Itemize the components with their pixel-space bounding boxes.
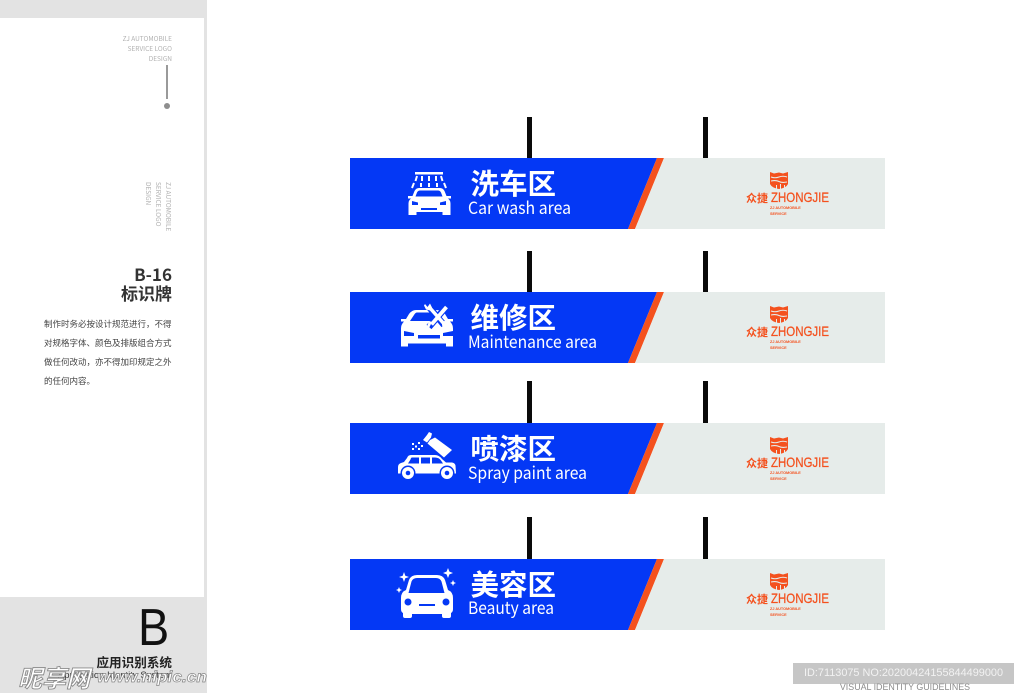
letter: large B: B: [138, 599, 169, 657]
poles: [527, 517, 708, 559]
text: sidebar description: 的任何内容。: [44, 375, 95, 387]
logo: ZJ AUTOMOBILE: [770, 206, 801, 210]
icon: car wash: [408, 172, 451, 215]
logo: SERVICE: [770, 613, 787, 617]
watermark: nipic logo: www.nipic.cn: [97, 669, 207, 686]
heading: B-16 sign: [121, 261, 172, 304]
logo: SERVICE: [770, 212, 787, 216]
sign 2: maintenance area: [350, 251, 885, 363]
text: sidebar description: 对规格字体、颜色及排版组合方式: [44, 337, 172, 349]
sign 3: spray paint area: [350, 381, 885, 494]
icon: shiny car: [396, 568, 456, 618]
title: 维修区: [470, 296, 556, 337]
poles: [527, 117, 708, 158]
sign face: [350, 559, 657, 630]
watermark: image id bar: [793, 663, 1014, 684]
logo: 众捷: [746, 190, 768, 206]
sign 2: maintenance area: Maintenance area: [468, 328, 597, 353]
logo: 众捷: [746, 324, 768, 340]
text: ZJ automobile service logo design: ZJ AUTOMOBILE: [123, 33, 172, 43]
logo: ZJ AUTOMOBILE: [770, 607, 801, 611]
text: ZJ automobile service logo design: SERVICE LOGO: [128, 43, 172, 53]
title: 洗车区: [470, 162, 556, 203]
sign face: [350, 423, 657, 494]
sign face: [350, 292, 657, 363]
title: 喷漆区: [470, 427, 556, 468]
logo: ZJ AUTOMOBILE: [770, 471, 801, 475]
text: ZJ automobile service logo design: [123, 33, 172, 63]
watermark: nipic logo: [18, 659, 207, 693]
watermark: nipic logo: 昵享网: [18, 659, 93, 693]
logo: [746, 172, 829, 216]
text: ZJ automobile service logo design: DESIGN: [149, 53, 172, 63]
sign 1: car wash area: [350, 117, 885, 229]
logo: ZHONGJIE: [771, 454, 829, 470]
logo: SERVICE: [770, 346, 787, 350]
text: application identity english: Application Identity System: [58, 670, 172, 681]
logo: [746, 306, 829, 350]
poles: [527, 251, 708, 292]
logo: ZHONGJIE: [771, 189, 829, 205]
title: 美容区: [470, 563, 556, 604]
panel: sidebar white sheet: [0, 18, 204, 597]
text: rotated logo design caption: ZJ AUTOMOBILE: [164, 182, 174, 231]
poles: [527, 381, 708, 423]
logo: 众捷: [746, 455, 768, 471]
logo: [746, 573, 829, 617]
heading: B-16 sign: B-16: [134, 261, 172, 286]
logo: ZHONGJIE: [771, 323, 829, 339]
heading: application identity system: 应用识别系统: [96, 652, 172, 671]
sign 4: beauty area: Beauty area: [468, 594, 554, 619]
decoration: line with dot: [164, 65, 170, 109]
text: rotated logo design caption: SERVICE LOGO: [154, 182, 164, 226]
panel: left sidebar: [0, 0, 207, 693]
logo: 众捷: [746, 591, 768, 607]
sign 3: spray paint area: Spray paint area: [468, 459, 587, 484]
text: rotated logo design caption: DESIGN: [144, 182, 154, 205]
logo: ZHONGJIE: [771, 590, 829, 606]
text: sidebar description: [44, 318, 172, 387]
logo: SERVICE: [770, 477, 787, 481]
text: rotated logo design caption: [144, 182, 174, 231]
icon: spray can over car: [398, 432, 456, 480]
text: sidebar description: 做任何改动，亦不得加印规定之外: [44, 356, 172, 368]
watermark: image id bar: ID:7113075 NO:20200424155844499000: [804, 667, 1003, 679]
sign 4: beauty area: [350, 517, 885, 630]
sign 1: car wash area: Car wash area: [468, 194, 571, 219]
heading: B-16 sign: 标识牌: [121, 280, 172, 304]
text: sidebar description: 制作时务必按设计规范进行，不得: [44, 318, 172, 330]
sign face: [350, 158, 657, 229]
logo: ZJ AUTOMOBILE: [770, 340, 801, 344]
logo: [746, 437, 829, 481]
footer: visual identity guidelines: VISUAL IDENTITY GUIDELINES: [840, 682, 970, 692]
icon: car with tools: [401, 304, 453, 346]
